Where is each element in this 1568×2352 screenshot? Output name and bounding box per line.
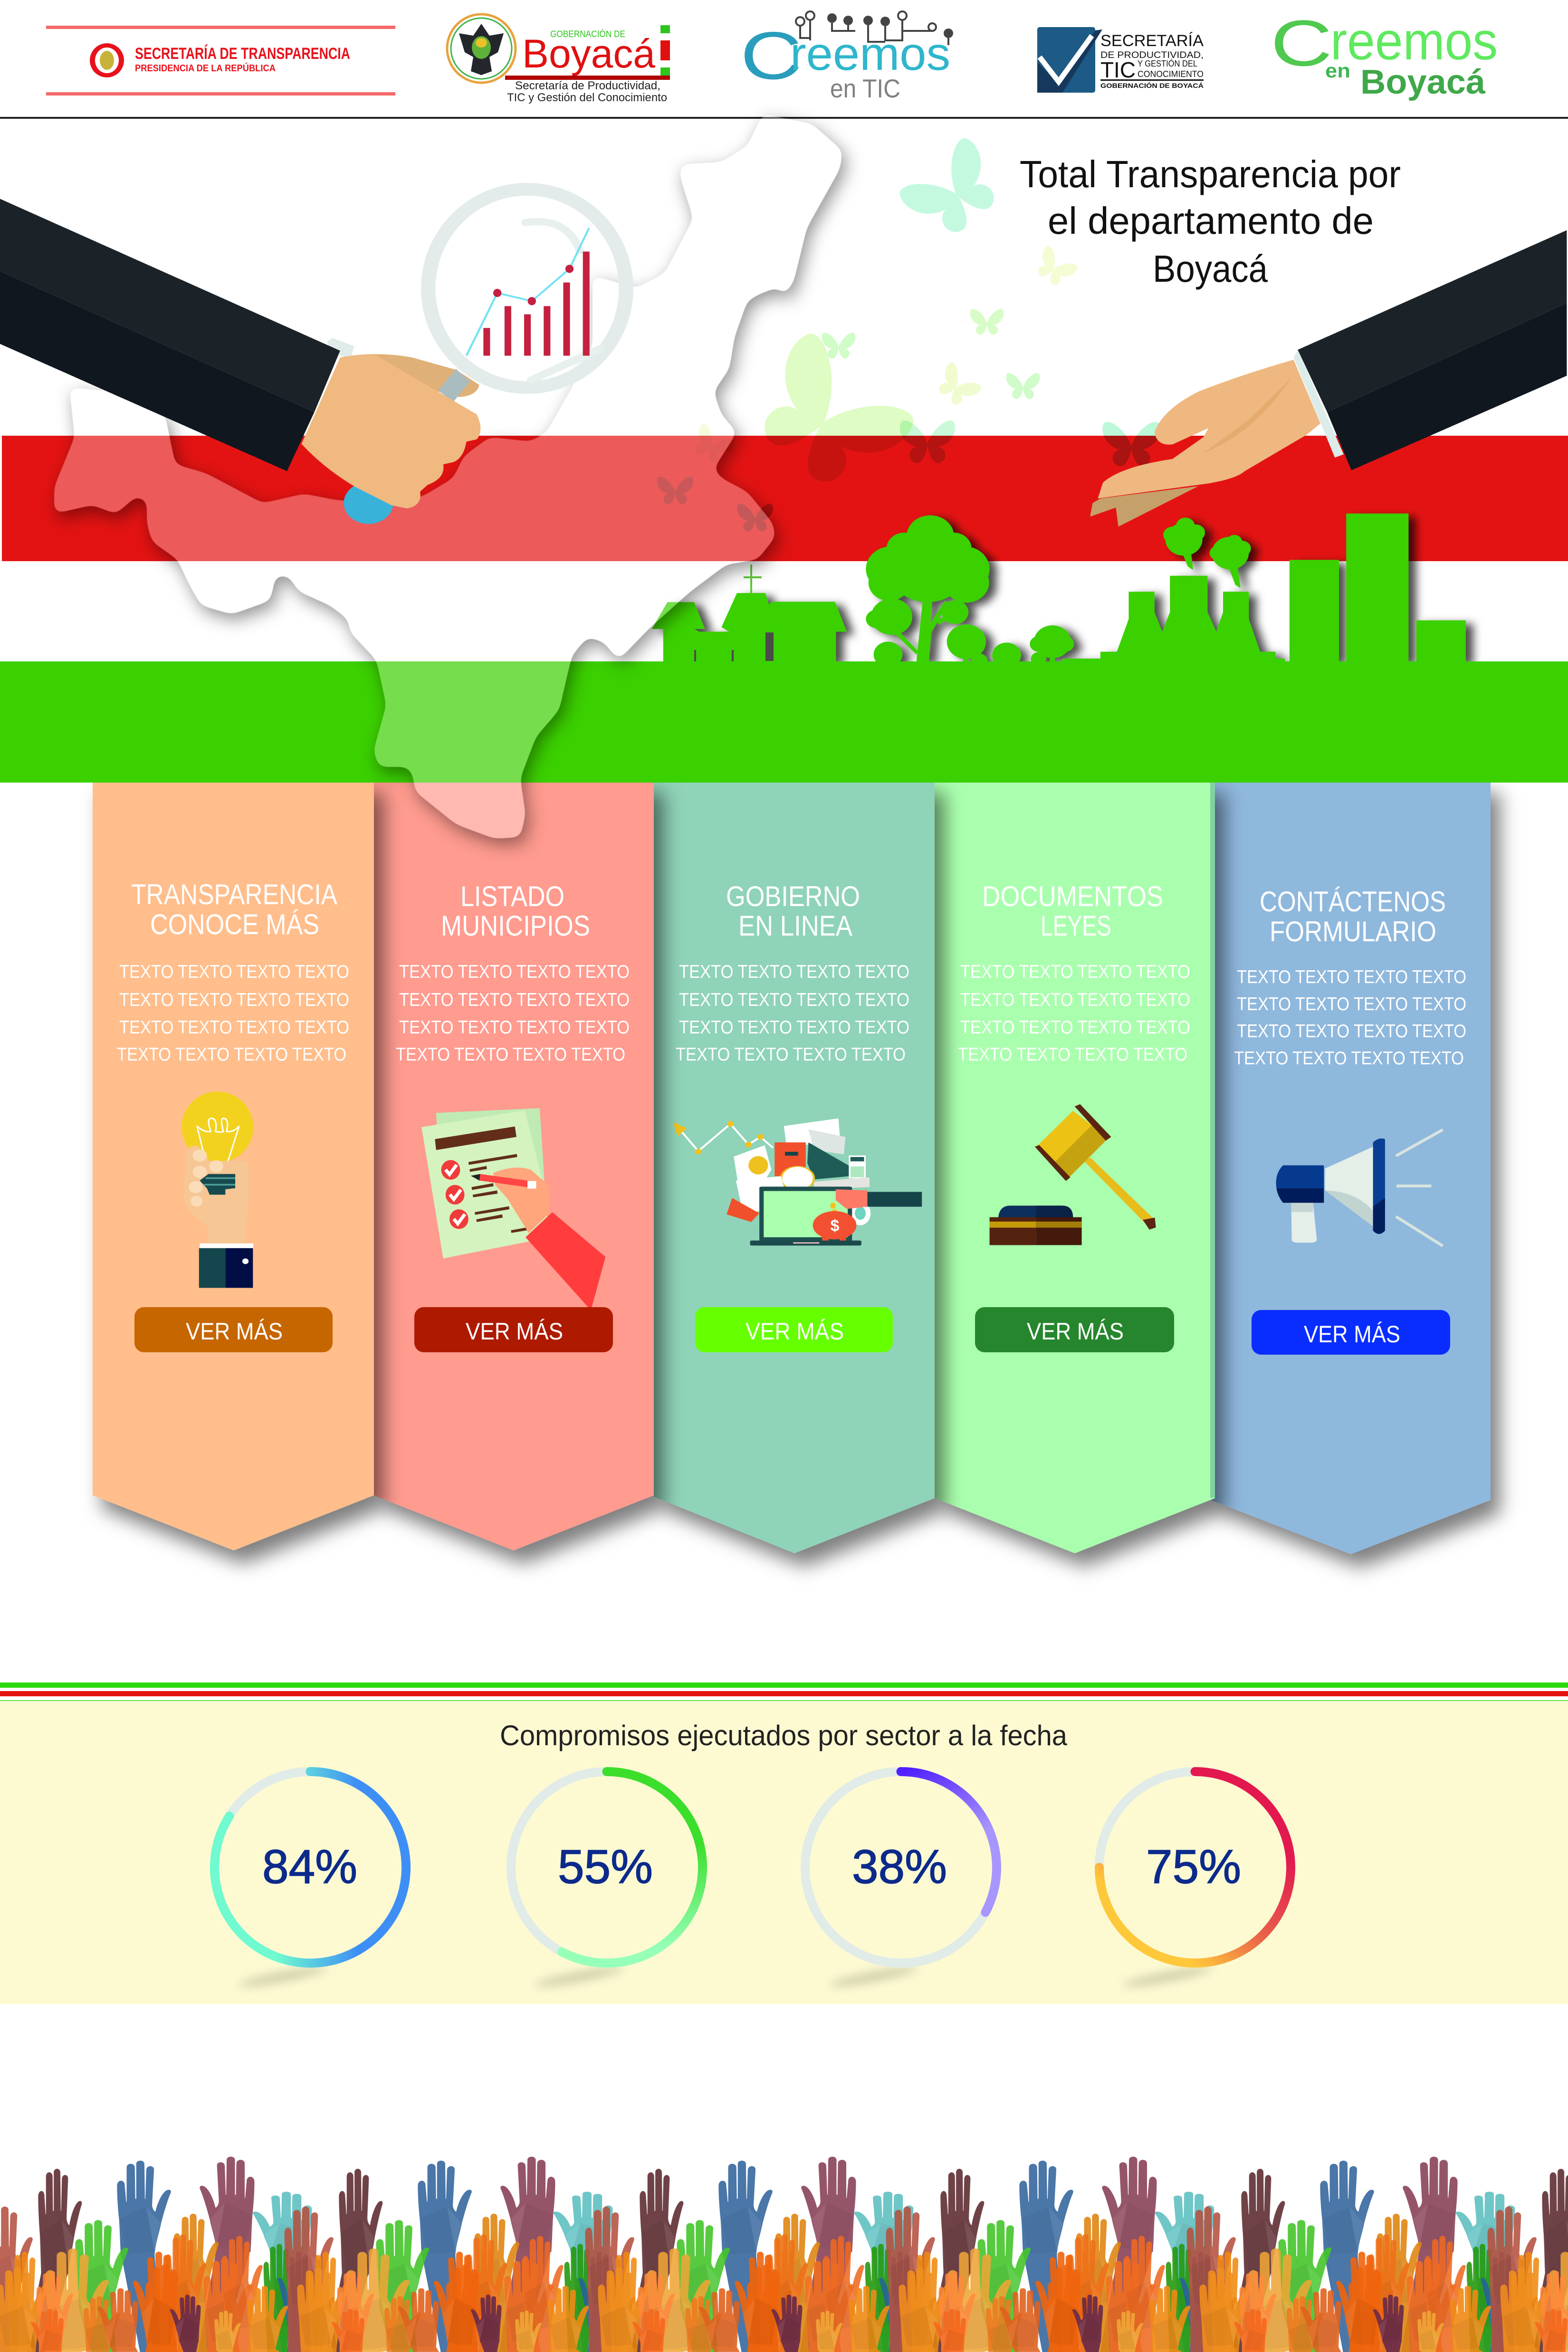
logo: Secretaría de Productividad TIC: TIC: [1100, 57, 1136, 82]
donut: 38%: 38%: [852, 1840, 947, 1893]
card text: [117, 962, 349, 1065]
button: ver más: VER MÁS: [1027, 1318, 1124, 1345]
button: ver más: [975, 1307, 1174, 1352]
card text: TEXTO TEXTO TEXTO TEXTO: [1237, 967, 1466, 987]
card text: TEXTO TEXTO TEXTO TEXTO: [119, 962, 349, 982]
button: ver más: VER MÁS: [1304, 1321, 1400, 1348]
map: Boyacá silhouette: [54, 114, 846, 845]
donut: 55%: [511, 1771, 703, 1990]
icon: laptop with office items: $: [831, 1217, 840, 1235]
panel: hero banner: [0, 114, 1568, 845]
logo: Secretaría de Productividad TIC: Y GESTIÓN DEL: [1138, 58, 1197, 68]
card text: TEXTO TEXTO TEXTO TEXTO: [396, 1044, 625, 1065]
card title: LEYES: [1041, 910, 1111, 942]
church windows: [694, 632, 774, 661]
city skyline: [652, 514, 1466, 668]
logo: Gobernación de Boyacá: TIC y Gestión del Conocimiento: [507, 91, 667, 104]
red band: [2, 436, 1568, 561]
logo: Gobernación de Boyacá: Boyacá: [522, 31, 655, 76]
tricolour stripes: [0, 1683, 1568, 1701]
card text: TEXTO TEXTO TEXTO TEXTO: [119, 1017, 349, 1038]
logo: Secretaría de Transparencia: SECRETARÍA DE TRANSPARENCIA: [135, 45, 350, 63]
card title: MUNICIPIOS: [441, 910, 590, 942]
card text: [1234, 967, 1466, 1069]
card text: TEXTO TEXTO TEXTO TEXTO: [399, 962, 630, 982]
logo: Creemos en TIC: C: [740, 18, 802, 94]
card title: CONOCE MÁS: [150, 908, 319, 940]
card title: [726, 880, 860, 942]
button: ver más: [414, 1307, 613, 1352]
card text: [958, 962, 1190, 1065]
heading: Compromisos ejecutados por sector a la fecha: [500, 1720, 1068, 1751]
green band: [0, 661, 1568, 783]
card text: TEXTO TEXTO TEXTO TEXTO: [679, 1017, 909, 1038]
donut: 84%: [215, 1771, 406, 1990]
logo: Secretaría de Productividad TIC: [1037, 27, 1204, 93]
raised hands strip: [0, 2157, 1568, 2352]
panel: documentos card: [935, 779, 1215, 1553]
right hand reaching down: [1090, 230, 1567, 526]
card text: TEXTO TEXTO TEXTO TEXTO: [679, 990, 909, 1010]
logo: Gobernación de Boyacá: Secretaría de Productividad,: [515, 79, 660, 92]
card title: [441, 880, 590, 942]
card text: TEXTO TEXTO TEXTO TEXTO: [399, 990, 630, 1010]
icon: checklist with hand: [421, 1108, 605, 1310]
card title: [982, 880, 1163, 942]
logo: Secretaría de Productividad TIC: CONOCIMIENTO: [1138, 69, 1204, 79]
logo: Secretaría de Productividad TIC: GOBERNACIÓN DE BOYACÁ: [1100, 81, 1204, 89]
left hand with magnifier: [0, 189, 626, 524]
card title: [131, 879, 337, 940]
butterflies: [657, 135, 1160, 531]
card title: [1260, 886, 1446, 947]
yellow background: [0, 1701, 1568, 2004]
logo: Creemos en TIC: [740, 11, 953, 103]
button: ver más: VER MÁS: [746, 1318, 844, 1345]
card text: TEXTO TEXTO TEXTO TEXTO: [119, 990, 349, 1010]
donut: 75%: [1100, 1771, 1291, 1990]
logo: Creemos en Boyacá: reemos: [1330, 11, 1498, 71]
donut: 84%: 84%: [262, 1840, 357, 1893]
card text: TEXTO TEXTO TEXTO TEXTO: [1237, 994, 1466, 1014]
icon: laptop with office items: [673, 1119, 922, 1245]
card title: CONTÁCTENOS: [1260, 886, 1446, 918]
logo: Gobernación de Boyacá: [447, 14, 670, 104]
church cross: [744, 564, 762, 593]
card text: TEXTO TEXTO TEXTO TEXTO: [960, 990, 1190, 1010]
title: [1020, 153, 1401, 290]
card text: TEXTO TEXTO TEXTO TEXTO: [679, 962, 909, 982]
card text: TEXTO TEXTO TEXTO TEXTO: [676, 1044, 906, 1065]
button: ver más: [134, 1307, 333, 1352]
icon: hand holding light bulb: [182, 1091, 253, 1288]
logo: Creemos en Boyacá: Boyacá: [1360, 63, 1486, 101]
logo: Creemos en Boyacá: [1271, 7, 1498, 101]
donut: 75%: 75%: [1146, 1840, 1241, 1893]
logo: Secretaría de Productividad TIC: DE PRODUCTIVIDAD,: [1100, 50, 1204, 60]
title: Boyacá: [1153, 248, 1268, 290]
panel: gobierno card: [654, 779, 935, 1553]
title: Total Transparencia por: [1020, 153, 1401, 195]
card title: FORMULARIO: [1270, 916, 1436, 947]
logo: Gobernación de Boyacá: GOBERNACIÓN DE: [550, 29, 625, 39]
logo: Secretaría de Productividad TIC: SECRETARÍA: [1100, 32, 1204, 50]
panel: compromisos: [0, 1683, 1568, 2004]
button: ver más: [1252, 1310, 1450, 1355]
panel: contactenos card: [1211, 779, 1491, 1554]
button: ver más: VER MÁS: [186, 1318, 283, 1345]
donut: 38%: [805, 1771, 997, 1990]
logo: Creemos en Boyacá: C: [1271, 7, 1332, 80]
card text: TEXTO TEXTO TEXTO TEXTO: [117, 1044, 346, 1065]
header rule: [0, 117, 1568, 119]
logo: Creemos en TIC: en TIC: [830, 74, 900, 103]
card text: TEXTO TEXTO TEXTO TEXTO: [958, 1044, 1187, 1065]
card title: GOBIERNO: [726, 880, 860, 912]
panel: municipios card: [373, 779, 654, 1550]
donut: 55%: 55%: [558, 1840, 653, 1893]
card title: TRANSPARENCIA: [131, 879, 337, 910]
card text: TEXTO TEXTO TEXTO TEXTO: [1234, 1048, 1464, 1069]
logo: Secretaría de Transparencia: PRESIDENCIA DE LA REPÚBLICA: [135, 62, 276, 74]
button: ver más: [695, 1307, 893, 1352]
card text: TEXTO TEXTO TEXTO TEXTO: [960, 1017, 1190, 1038]
logo: Creemos en TIC: reemos: [790, 28, 950, 80]
title: el departamento de: [1048, 200, 1374, 242]
card text: [396, 962, 630, 1065]
header logos: [46, 7, 1498, 104]
card text: TEXTO TEXTO TEXTO TEXTO: [1237, 1021, 1466, 1042]
card text: [676, 962, 909, 1065]
icon: gavel: [990, 1104, 1156, 1245]
logo: Creemos en Boyacá: en: [1325, 59, 1350, 82]
card text: TEXTO TEXTO TEXTO TEXTO: [399, 1017, 630, 1038]
icon: megaphone: [1276, 1130, 1443, 1246]
panel: transparencia card: [93, 779, 374, 1550]
card title: DOCUMENTOS: [982, 880, 1163, 912]
logo: Secretaría de Transparencia: [46, 26, 395, 96]
card text: TEXTO TEXTO TEXTO TEXTO: [960, 962, 1190, 982]
button: ver más: VER MÁS: [466, 1318, 563, 1345]
card title: EN LINEA: [738, 910, 852, 942]
card title: LISTADO: [460, 880, 564, 912]
